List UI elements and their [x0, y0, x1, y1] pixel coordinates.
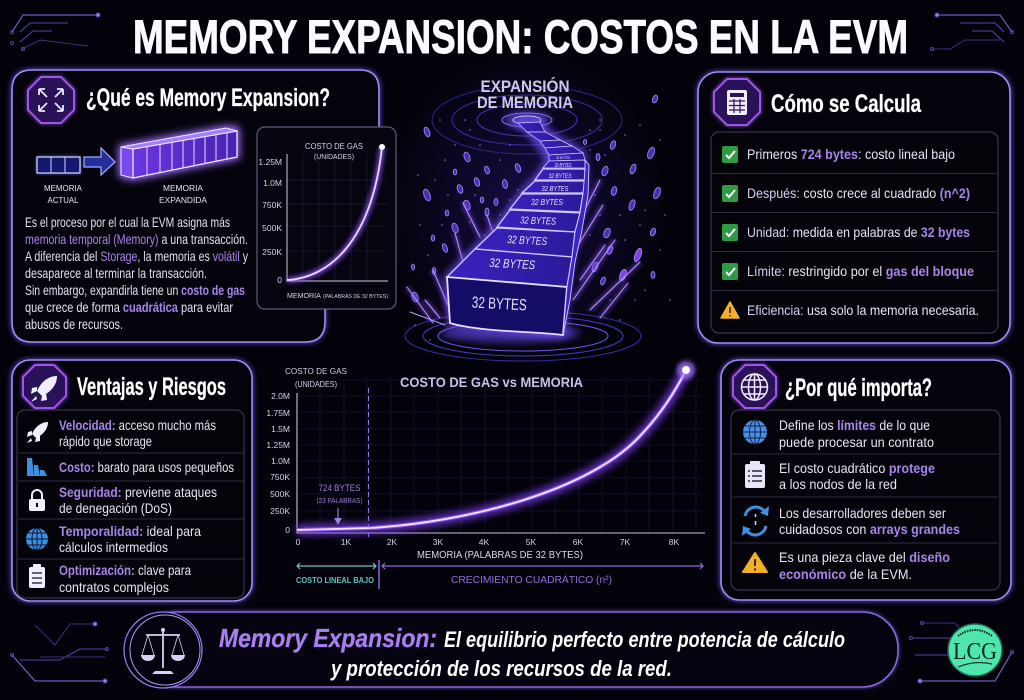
circuit decoration: bottom left	[10, 622, 108, 683]
y axis labels: 1.0M	[271, 456, 290, 466]
illustration heading: EXPANSIÓN	[480, 77, 570, 96]
icon: rocket	[23, 365, 66, 408]
row: límite: Límite: restringido por el gas del bloque	[747, 263, 974, 279]
y axis labels: 1.5M	[271, 424, 290, 434]
description text: que crece de forma cuadrática para evitar	[25, 299, 233, 315]
stack labels: 32 BYTES	[531, 197, 563, 207]
mini chart labels	[258, 141, 388, 300]
row: límites: puede procesar un contrato	[779, 434, 934, 450]
row: protege	[745, 460, 935, 492]
mini chart labels: 0	[277, 275, 282, 285]
mini chart labels: 750K	[262, 200, 282, 210]
arrow: expansion	[84, 148, 115, 175]
footer text: Memory Expansion:	[219, 623, 437, 653]
x axis labels: 1K	[341, 537, 352, 547]
description text: Es el proceso por el cual la EVM asigna más	[25, 214, 230, 230]
stack labels: 32 BYTES	[542, 184, 568, 193]
x axis labels: 4K	[479, 537, 490, 547]
stack segments	[447, 122, 589, 335]
row: diseño económico: Es una pieza clave del diseño	[779, 549, 950, 565]
x axis labels: 5K	[526, 537, 537, 547]
row: arrays grandes: Los desarrolladores deben ser	[779, 505, 946, 521]
diagram labels: MEMORIA	[163, 184, 204, 193]
x axis labels	[296, 537, 680, 547]
diagram labels: ACTUAL	[48, 196, 79, 205]
mini chart labels: 250K	[262, 247, 282, 257]
list box	[17, 410, 244, 598]
row: arrays grandes	[742, 505, 960, 537]
row: velocidad: Velocidad: acceso mucho más	[59, 417, 216, 433]
sparks and dots	[407, 180, 640, 325]
glow behind stack	[447, 123, 585, 335]
circuit decoration: top right	[930, 13, 1014, 50]
row: protege: a los nodos de la red	[779, 476, 897, 492]
row: temporalidad	[26, 523, 201, 555]
stack labels: 32 BYTES	[520, 215, 557, 228]
row: límites	[743, 417, 934, 450]
row: unidad: Unidad: medida en palabras de 32 bytes	[747, 224, 970, 240]
row: protege: El costo cuadrático protege	[779, 460, 935, 476]
footer text: y protección de los recursos de la red.	[330, 656, 672, 681]
diagram labels: EXPANDIDA	[159, 196, 208, 205]
diagram: expanded memory blocks	[121, 128, 237, 178]
stack labels: 32 BYTES	[507, 234, 548, 248]
footer text: El equilibrio perfecto entre potencia de cálculo	[444, 627, 845, 652]
diagram labels: MEMORIA	[44, 184, 83, 193]
row: temporalidad: Temporalidad: ideal para	[59, 523, 201, 539]
row: seguridad	[29, 484, 217, 516]
row: optimización	[29, 562, 191, 595]
stack labels: 32 BYTES	[554, 163, 572, 169]
heading: Ventajas y Riesgos	[77, 373, 226, 401]
mini chart labels: 1.25M	[258, 157, 282, 167]
floating particles	[410, 94, 662, 303]
bottom rings	[405, 311, 641, 361]
y axis labels: 500K	[270, 489, 290, 499]
panel: cómo se calcula	[698, 72, 1010, 343]
range: costo lineal bajo	[296, 563, 376, 585]
row: seguridad: de denegación (DoS)	[59, 500, 172, 516]
row: diseño económico	[743, 549, 950, 582]
y axis title	[285, 366, 347, 389]
description text: abusos de recursos.	[25, 316, 123, 332]
range: crecimiento cuadrático: CRECIMIENTO CUADRÁTICO (n²)	[451, 573, 612, 586]
sparks glow	[407, 180, 640, 323]
row: eficiencia: Eficiencia: usa solo la memoria necesaria.	[747, 302, 979, 318]
mini chart curve	[287, 144, 385, 280]
checklist box	[711, 132, 998, 333]
y axis labels: 2.0M	[271, 391, 290, 401]
stack labels: 32 BYTES	[548, 173, 572, 180]
footer banner	[124, 612, 898, 688]
mini chart labels: COSTO DE GAS	[305, 141, 363, 151]
logo: LCG: LCG	[953, 639, 997, 665]
mini chart labels: 500K	[262, 223, 282, 233]
heading: ¿Qué es Memory Expansion?	[86, 84, 330, 112]
description text: desaparece al terminar la transacción.	[25, 265, 207, 281]
stack labels: 32 BYTES	[489, 256, 536, 272]
diagram: current memory blocks	[37, 157, 80, 173]
row: temporalidad: cálculos intermedios	[59, 539, 168, 555]
callout: 724 bytes: 724 BYTES	[318, 483, 360, 493]
central illustration: memory stack	[385, 50, 670, 370]
range: costo lineal bajo: COSTO LINEAL BAJO	[296, 575, 374, 585]
heading: ¿Por qué importa?	[785, 374, 932, 402]
row: velocidad: rápido que storage	[59, 433, 152, 449]
description text: Sin embargo, expandirla tiene un costo de gas	[25, 282, 245, 298]
x axis labels: 3K	[433, 537, 444, 547]
y axis labels: 1.25M	[266, 440, 290, 450]
main chart: costo de gas vs memoria	[266, 361, 705, 589]
mini chart labels: 1.0M	[263, 178, 282, 188]
y axis title: (UNIDADES)	[295, 380, 337, 389]
row: diseño económico: económico de la EVM.	[779, 566, 912, 582]
description text: A diferencia del Storage, la memoria es volátil y	[25, 248, 248, 264]
callout: 724 bytes	[316, 483, 362, 525]
row: después: Después: costo crece al cuadrado (n^2)	[747, 185, 970, 201]
logo: LCG	[948, 624, 1002, 676]
icon: balance scale	[124, 612, 202, 688]
y axis labels	[266, 391, 290, 535]
description text	[25, 214, 248, 332]
callout: 724 bytes: (23 PALABRAS)	[316, 498, 362, 505]
range: crecimiento cuadrático	[382, 563, 703, 586]
row: costo	[27, 458, 234, 476]
stack labels: 32 BYTES	[556, 155, 570, 160]
diagram labels	[44, 184, 208, 205]
circuit decoration: bottom right	[910, 622, 1014, 683]
heading: Cómo se Calcula	[771, 90, 922, 118]
panel: por qué importa	[721, 360, 1011, 600]
row: arrays grandes: cuidadosos con arrays grandes	[779, 521, 960, 537]
row: optimización: contratos complejos	[59, 579, 169, 595]
row: velocidad	[27, 417, 216, 449]
panel: ventajas y riesgos	[12, 360, 252, 601]
description text: memoria temporal (Memory) a una transacción.	[25, 231, 248, 247]
x axis title: MEMORIA (PALABRAS DE 32 BYTES)	[417, 550, 583, 561]
panel: qué es memory expansion	[12, 70, 379, 342]
y axis labels: 1.75M	[266, 408, 290, 418]
stack labels: 32 BYTES	[471, 295, 527, 314]
icon: calculator	[714, 79, 760, 125]
stack labels	[471, 155, 572, 314]
row: seguridad: Seguridad: previene ataques	[59, 484, 217, 500]
x axis labels: 0	[296, 537, 301, 547]
x axis labels: 8K	[669, 537, 680, 547]
x axis labels: 6K	[573, 537, 584, 547]
icon: expand arrows	[28, 77, 74, 123]
y axis labels: 250K	[270, 506, 290, 516]
circuit decoration: top left	[10, 13, 100, 50]
list box	[731, 410, 1000, 590]
panel: mini chart costo de gas	[257, 127, 396, 309]
row: límites: Define los límites de lo que	[779, 417, 930, 433]
row: costo: Costo: barato para usos pequeños	[59, 459, 234, 475]
chart curve	[297, 361, 695, 530]
icon: globe	[733, 365, 776, 408]
mini chart labels: (UNIDADES)	[314, 152, 354, 161]
mini chart labels: MEMORIA (PALABRAS DE 32 BYTES)	[287, 290, 388, 300]
y axis labels: 0	[285, 525, 290, 535]
row: optimización: Optimización: clave para	[59, 562, 191, 578]
y axis title: COSTO DE GAS	[285, 366, 347, 376]
row: primeros 724 bytes: Primeros 724 bytes: costo lineal bajo	[747, 146, 955, 162]
x axis labels: 2K	[387, 537, 398, 547]
x axis labels: 7K	[620, 537, 631, 547]
footer text	[219, 623, 845, 681]
top rings	[432, 86, 622, 154]
central illustration: memory stack: DE MEMORIA	[477, 94, 573, 112]
y axis labels: 750K	[270, 472, 290, 482]
chart heading: COSTO DE GAS vs MEMORIA	[400, 374, 583, 390]
